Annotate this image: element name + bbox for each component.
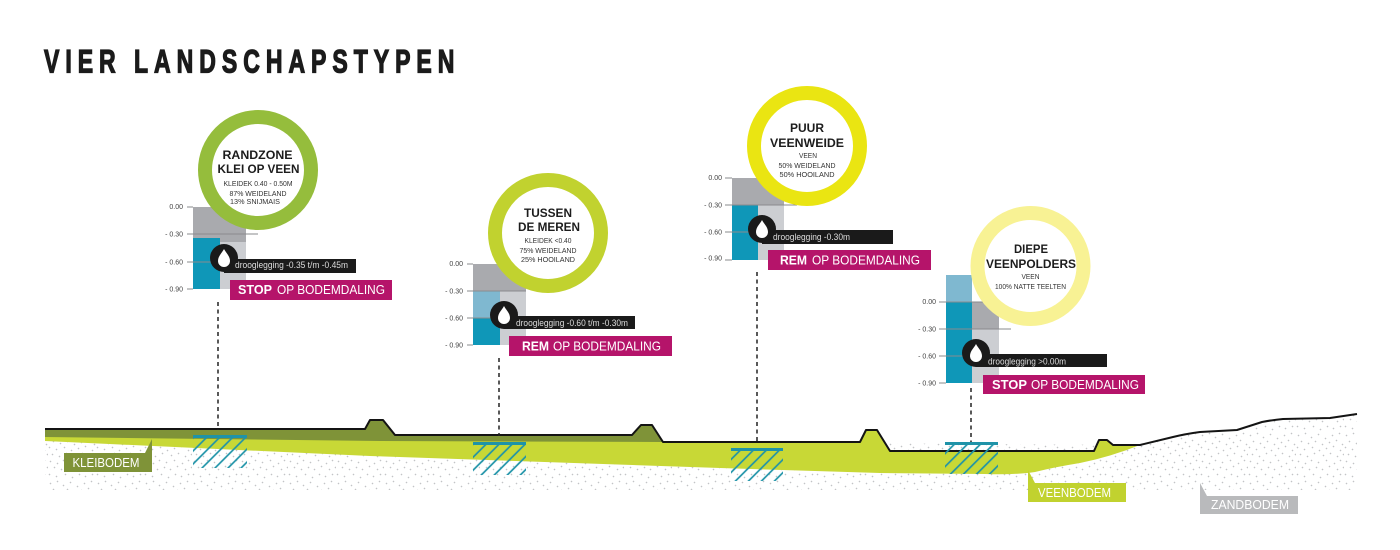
ring with type description: PUUR bbox=[790, 121, 824, 135]
callout: rem: OP BODEMDALING bbox=[553, 338, 661, 354]
ring with type description: KLEI OP VEEN bbox=[218, 162, 300, 176]
ring with type description: KLEIDEK <0.40 bbox=[524, 236, 572, 245]
dashed connector bbox=[498, 358, 500, 436]
label: zandbodem: ZANDBODEM bbox=[1211, 497, 1289, 512]
water level chart: 0.00 bbox=[922, 299, 936, 306]
callout: rem: OP BODEMDALING bbox=[812, 252, 920, 268]
water level chart: - 0.90 bbox=[165, 286, 183, 294]
drooglegging bar with water drop bbox=[748, 215, 893, 244]
clay layer bbox=[45, 420, 663, 442]
water level chart: - 0.60 bbox=[918, 354, 936, 360]
hatch: diepe veenpolders bbox=[945, 442, 998, 474]
water level chart bbox=[165, 204, 258, 294]
callout: stop bbox=[230, 280, 392, 300]
water level chart: - 0.30 bbox=[445, 288, 463, 296]
ring with type description: 75% WEIDELAND bbox=[520, 246, 577, 255]
callout: stop bbox=[983, 375, 1145, 394]
hatch: randzone bbox=[193, 435, 247, 468]
callout: stop: STOP bbox=[992, 377, 1027, 392]
water level chart: - 0.90 bbox=[704, 256, 722, 262]
ring with type description: 87% WEIDELAND bbox=[230, 189, 287, 198]
hatch: puur veenweide bbox=[731, 448, 783, 481]
callout: rem: REM bbox=[522, 338, 549, 354]
title: VIER LANDSCHAPSTYPEN bbox=[44, 44, 454, 79]
callout: stop: OP BODEMDALING bbox=[1031, 377, 1139, 392]
panel: tussen de meren bbox=[445, 180, 672, 436]
ring with type description: VEEN bbox=[799, 151, 817, 160]
sand layer bbox=[45, 414, 1357, 490]
drooglegging bar with water drop: drooglegging -0.30m bbox=[773, 232, 850, 243]
ring with type description: 13% SNIJMAIS bbox=[230, 197, 280, 206]
dashed connector bbox=[756, 272, 758, 442]
drooglegging bar with water drop bbox=[962, 339, 1107, 368]
drooglegging bar with water drop bbox=[210, 244, 356, 273]
callout: rem: REM bbox=[780, 252, 807, 268]
ring with type description: VEENWEIDE bbox=[770, 136, 844, 150]
label: veenbodem bbox=[1028, 470, 1126, 502]
water level chart: - 0.90 bbox=[918, 380, 936, 388]
water level chart bbox=[704, 175, 797, 262]
panel: diepe veenpolders bbox=[918, 213, 1145, 442]
label: kleibodem bbox=[64, 439, 152, 472]
ring with type description: RANDZONE bbox=[222, 148, 292, 162]
ring with type description: 25% HOOILAND bbox=[521, 255, 576, 264]
peat layer bbox=[45, 420, 1140, 474]
water level chart: - 0.60 bbox=[704, 230, 722, 236]
callout: rem bbox=[768, 250, 931, 270]
ring with type description: 50% HOOILAND bbox=[780, 170, 835, 179]
ring with type description: VEEN bbox=[1022, 272, 1040, 281]
label: veenbodem: VEENBODEM bbox=[1038, 485, 1111, 500]
panel: puur veenweide bbox=[704, 93, 931, 442]
water level chart: - 0.60 bbox=[165, 260, 183, 266]
callout: stop: OP BODEMDALING bbox=[277, 282, 385, 297]
ring with type description: KLEIDEK 0.40 - 0.50M bbox=[224, 179, 292, 188]
drooglegging bar with water drop: drooglegging >0.00m bbox=[988, 356, 1066, 368]
ring with type description bbox=[754, 93, 860, 199]
drooglegging bar with water drop bbox=[490, 301, 635, 329]
water level chart: 0.00 bbox=[449, 261, 463, 268]
ring with type description: DE MEREN bbox=[518, 220, 580, 234]
dashed connector bbox=[217, 302, 219, 430]
water level chart: - 0.30 bbox=[165, 232, 183, 238]
water level chart: - 0.90 bbox=[445, 342, 463, 350]
water level chart: 0.00 bbox=[708, 175, 722, 182]
water level chart: 0.00 bbox=[169, 204, 183, 211]
hatch: tussen de meren bbox=[473, 442, 526, 475]
callout: stop: STOP bbox=[238, 282, 272, 297]
drooglegging bar with water drop: drooglegging -0.60 t/m -0.30m bbox=[516, 318, 628, 329]
ring with type description: TUSSEN bbox=[524, 206, 572, 220]
ring with type description bbox=[978, 213, 1084, 319]
label: kleibodem: KLEIBODEM bbox=[72, 455, 140, 470]
water level chart: - 0.60 bbox=[445, 316, 463, 322]
ground line bbox=[45, 414, 1357, 451]
panel: randzone klei op veen bbox=[165, 117, 392, 430]
ring with type description: 50% WEIDELAND bbox=[778, 161, 836, 170]
water level chart: - 0.30 bbox=[918, 326, 936, 334]
ring with type description: VEENPOLDERS bbox=[986, 257, 1076, 271]
ring with type description: 100% NATTE TEELTEN bbox=[995, 282, 1066, 291]
ring with type description bbox=[495, 180, 601, 286]
landscape cross-section bbox=[45, 414, 1357, 490]
ring with type description: DIEPE bbox=[1014, 242, 1048, 256]
water level chart: - 0.30 bbox=[704, 202, 722, 210]
water level chart bbox=[918, 275, 1011, 388]
drooglegging bar with water drop: drooglegging -0.35 t/m -0.45m bbox=[235, 260, 348, 271]
label: zandbodem bbox=[1200, 483, 1298, 514]
dashed connector bbox=[970, 388, 972, 442]
ring with type description bbox=[205, 117, 311, 223]
callout: rem bbox=[509, 336, 672, 356]
water level chart bbox=[445, 261, 526, 350]
